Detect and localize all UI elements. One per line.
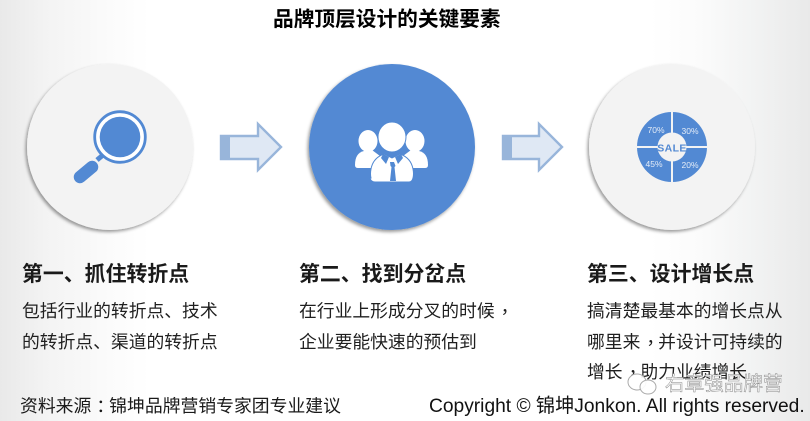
icon: sale donut chart: 70% [647, 125, 665, 135]
watermark [628, 373, 783, 395]
title: 品牌顶层设计的关键要素 [273, 8, 501, 31]
body 3: 搞清楚最基本的增长点从 [587, 301, 783, 321]
watermark text: 右章强品牌营 [665, 373, 783, 395]
body 1: 包括行业的转折点、技术 [22, 301, 218, 321]
body 2 [299, 297, 518, 352]
heading 1: 第一、抓住转折点 [22, 263, 189, 286]
body 2: 企业要能快速的预估到 [299, 332, 477, 352]
body 3: 哪里来 ，并设计可持续的 [587, 328, 783, 352]
icon: sale donut chart: 45% [645, 159, 663, 169]
circle 2: team [309, 64, 475, 230]
icon: chat bubbles [628, 374, 656, 394]
body 2: 在行业上形成分叉的时候 ， [299, 297, 518, 321]
icon: sale donut chart [636, 111, 708, 183]
circle 1: magnifier [27, 64, 193, 230]
arrow 1 [220, 124, 281, 170]
source note: 资料来源 ：锦坤品牌营销专家团专业建议 [20, 396, 341, 416]
body 1 [22, 301, 218, 352]
column 3 text [587, 262, 783, 382]
body 3 [587, 301, 783, 382]
body 1: 的转折点、渠道的转折点 [22, 332, 218, 352]
body 3: 增长 ，助力业绩增长 [587, 358, 747, 382]
icon: sale donut chart: SALE [657, 142, 687, 154]
arrow 2 [502, 124, 562, 170]
icon: sale donut chart: 30% [681, 126, 699, 136]
heading 3: 第三、设计增长点 [587, 263, 754, 286]
icon: magnifying glass [80, 112, 145, 177]
column 2 text [299, 262, 518, 352]
circle 3: sale chart [589, 64, 755, 230]
heading 2: 第二、找到分岔点 [299, 263, 466, 286]
copyright: Copyright © 锦坤Jonkon. All rights reserved. [429, 396, 805, 417]
icon: sale donut chart: 20% [681, 160, 699, 170]
icon: people [355, 122, 428, 182]
column 1 text [22, 262, 218, 352]
